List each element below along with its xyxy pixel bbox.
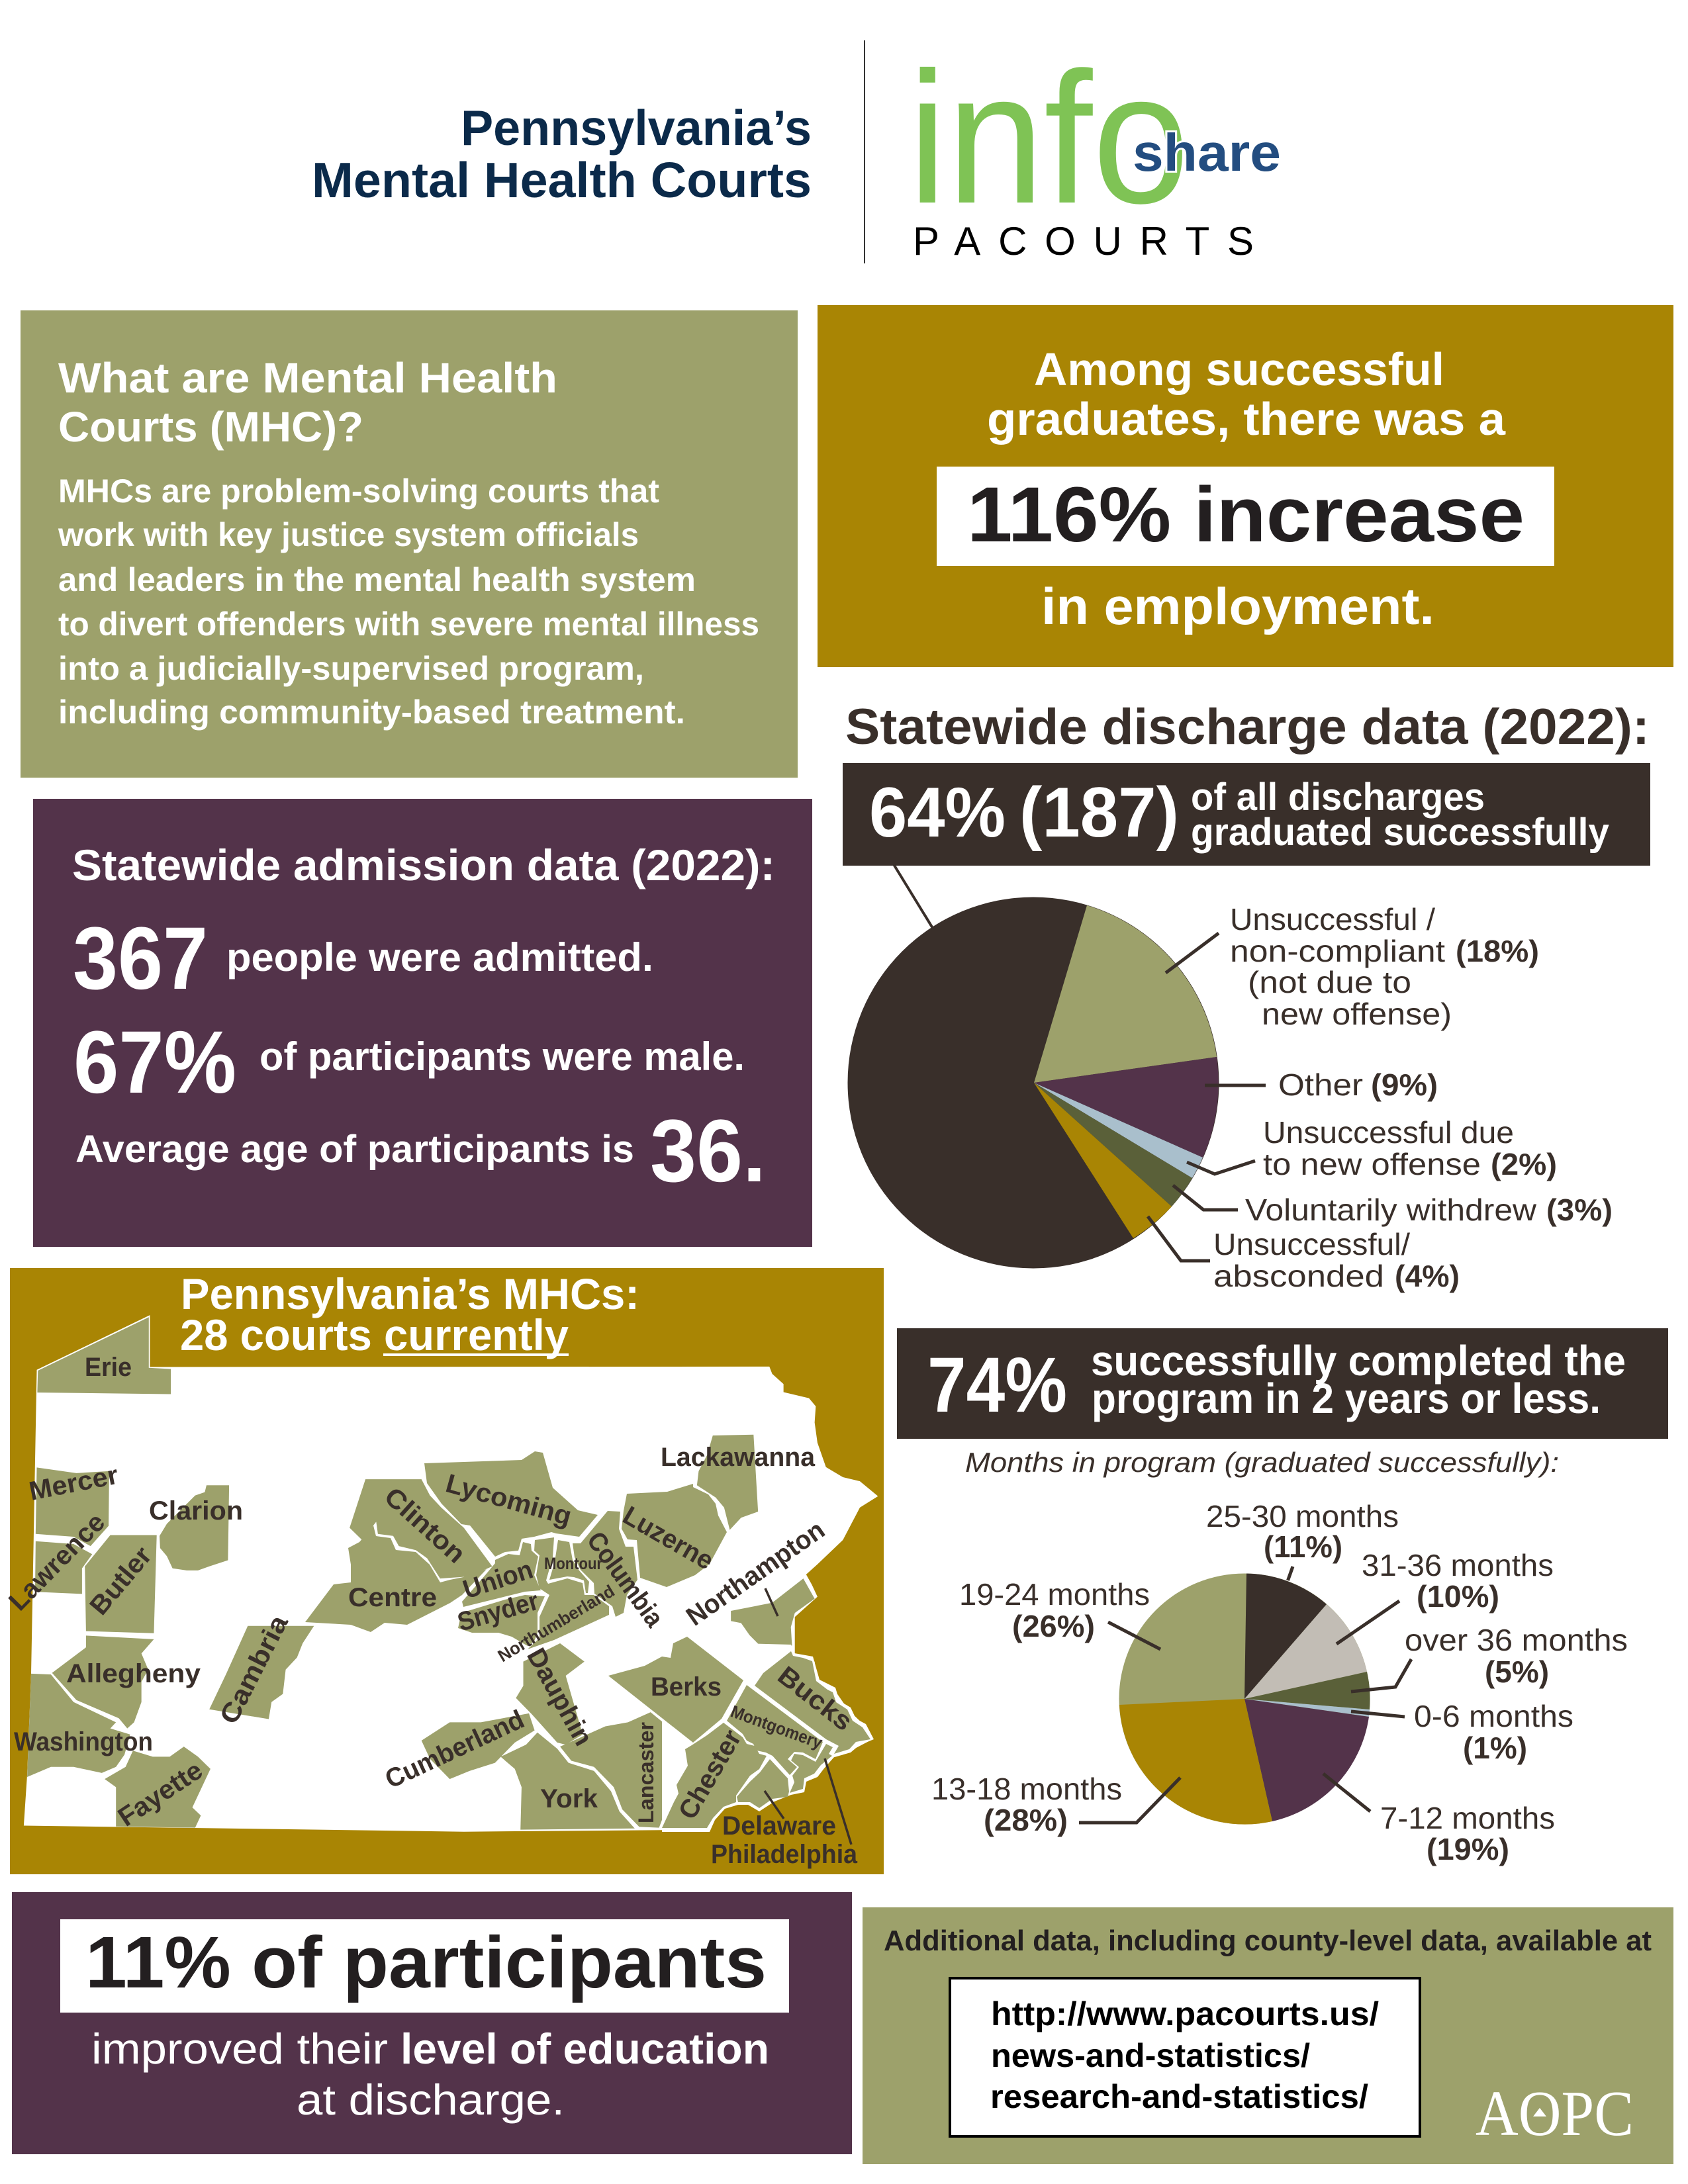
text block: improved level of education: at discharge.: [297, 2075, 565, 2124]
county labels: Cumberland: [381, 1705, 529, 1794]
label: 7-12 months 19%: (19%): [1427, 1832, 1509, 1866]
panel: Pennsylvania map of MHCs: [3, 1268, 884, 1874]
label: unsuccessful non-compliant 18%: Unsuccessful /: [1230, 902, 1435, 936]
label: over 36 months 5%: over 36 months: [1405, 1623, 1628, 1657]
map: central and southeastern counties: [305, 1451, 874, 1832]
heading: months in program: Months in program (graduated successfully):: [965, 1447, 1559, 1478]
callout: 64% graduated successfully: 64%: [869, 772, 1006, 852]
text block: improved level of education: level of education: [400, 2025, 769, 2073]
label: absconded 4%: Unsuccessful/: [1213, 1227, 1410, 1261]
county labels: Washington: [14, 1727, 153, 1756]
county labels: Berks: [651, 1672, 722, 1702]
county labels: Butler: [84, 1541, 158, 1621]
label: unsuccessful non-compliant 18%: [1230, 902, 1539, 1031]
text block: MHC definition: to divert offenders with severe mental illness: [58, 606, 759, 643]
county labels: Clinton: [379, 1482, 471, 1569]
text block: additional data note: Additional data, including county-level data, available at: [884, 1925, 1652, 1957]
label: 19-24 months 26%: (26%): [1012, 1609, 1095, 1643]
heading: Pennsylvania's MHCs 28 courts: Pennsylvania’s MHCs:: [181, 1269, 639, 1318]
logo: AOPC: AOPC: [1476, 2078, 1634, 2150]
county labels: Centre: [348, 1583, 437, 1612]
county labels: Lancaster: [634, 1722, 658, 1823]
label: 0-6 months 1%: 0-6 months: [1414, 1699, 1573, 1733]
county labels: Chester: [673, 1725, 747, 1824]
label: unsuccessful new offense 2%: [1263, 1115, 1557, 1181]
county labels: Bucks: [772, 1661, 858, 1737]
stat: average age 36: 36.: [650, 1102, 766, 1201]
label: unsuccessful non-compliant 18%: (18%): [1456, 934, 1539, 968]
heading: what are MHC: Courts (MHC)?: [58, 403, 363, 451]
label: 13-18 months 28%: (28%): [984, 1803, 1068, 1837]
stat: average age 36: [75, 1102, 766, 1201]
label: 31-36 months 10%: [1362, 1548, 1554, 1614]
county labels: Mercer: [26, 1461, 120, 1506]
logo: infoshare PACOURTS: info: [908, 33, 1190, 242]
label: 0-6 months 1%: (1%): [1463, 1731, 1527, 1765]
county labels: Montour: [544, 1555, 602, 1573]
stat: average age 36: Average age of participants is: [75, 1128, 634, 1171]
text block: MHC definition: into a judicially-supervised program,: [58, 650, 644, 687]
heading: Pennsylvania's MHCs 28 courts: 28 courts currently: [180, 1310, 569, 1359]
callout: 64% graduated successfully: [843, 763, 1650, 866]
label: 25-30 months 11%: (11%): [1264, 1529, 1342, 1564]
county labels: Lackawanna: [661, 1443, 816, 1472]
label: unsuccessful non-compliant 18%: non-compliant: [1230, 934, 1445, 968]
stat: 367 admitted: [73, 909, 653, 1008]
label: unsuccessful non-compliant 18%: new offense): [1262, 997, 1452, 1031]
label: over 36 months 5%: (5%): [1485, 1655, 1549, 1689]
county labels: Dauphin: [521, 1643, 598, 1751]
label: absconded 4%: (4%): [1395, 1259, 1460, 1293]
label: unsuccessful non-compliant 18%: (not due to: [1248, 965, 1411, 999]
label: 0-6 months 1%: [1414, 1699, 1573, 1765]
county labels: Lycoming: [443, 1469, 575, 1531]
panel: what are mental health courts: [21, 310, 798, 778]
stat: 67% male: of participants were male.: [259, 1034, 745, 1079]
label: 13-18 months 28%: 13-18 months: [931, 1772, 1122, 1806]
callout: 74% completed in 2 years: [897, 1328, 1668, 1439]
heading: statewide admission data: Statewide admission data (2022):: [72, 841, 775, 889]
text block: improved level of education: [91, 2025, 769, 2124]
county labels: Columbia: [581, 1526, 669, 1633]
callout: 11% of participants: 11% of participants: [85, 1922, 767, 2003]
label: other 9%: [1278, 1068, 1438, 1102]
callout: 64% graduated successfully: of all discharges: [1191, 776, 1485, 819]
stat: 67% male: 67%: [73, 1013, 236, 1112]
callout: 64% graduated successfully: graduated successfully: [1191, 811, 1609, 854]
title: Pennsylvania's Mental Health Courts: [312, 100, 812, 208]
link box: pacourts URL: [950, 1978, 1420, 2136]
text block: MHC definition: including community-based treatment.: [58, 694, 685, 731]
text block: in employment: in employment.: [1041, 577, 1434, 635]
heading: what are MHC: [58, 354, 557, 451]
stat: 367 admitted: people were admitted.: [226, 935, 653, 979]
stat: 67% male: [73, 1013, 745, 1112]
link box: pacourts URL: http://www.pacourts.us/: [991, 1995, 1379, 2032]
county labels: Montgomery: [728, 1701, 825, 1752]
county labels: Allegheny: [66, 1659, 201, 1688]
label: 19-24 months 26%: 19-24 months: [959, 1577, 1150, 1612]
label: 7-12 months 19%: 7-12 months: [1380, 1801, 1555, 1835]
label: unsuccessful new offense 2%: Unsuccessful due: [1263, 1115, 1514, 1150]
county labels: Union: [459, 1555, 536, 1605]
county labels: Luzerne: [618, 1501, 718, 1576]
county labels: Philadelphia: [711, 1840, 858, 1869]
link box: pacourts URL: research-and-statistics/: [990, 2078, 1368, 2115]
callout: 64% graduated successfully: (187): [1019, 772, 1179, 852]
stat: 367 admitted: 367: [73, 909, 208, 1008]
label: over 36 months 5%: [1405, 1623, 1628, 1689]
county labels: Erie: [85, 1353, 132, 1382]
text block: improved level of education: improved their: [91, 2025, 388, 2073]
heading: statewide discharge data: Statewide discharge data (2022):: [845, 699, 1650, 755]
label: unsuccessful new offense 2%: (2%): [1491, 1147, 1557, 1181]
label: absconded 4%: [1213, 1227, 1460, 1293]
panel: employment increase: [818, 305, 1673, 667]
text block: MHC definition: MHCs are problem-solving courts that: [58, 473, 659, 510]
callout: 74% completed in 2 years: program in 2 years or less.: [1092, 1375, 1601, 1422]
text block: MHC definition: [58, 473, 759, 731]
heading: what are MHC: What are Mental Health: [58, 354, 557, 402]
logo: infoshare PACOURTS: PACOURTS: [913, 219, 1254, 263]
text block: among successful graduates: graduates, there was a: [987, 393, 1506, 445]
county labels: Snyder: [454, 1586, 542, 1637]
county labels: Northampton: [681, 1515, 830, 1631]
county labels: [3, 1353, 858, 1869]
county labels: Northumberland: [494, 1580, 618, 1666]
pie chart: discharge outcomes: [847, 864, 1266, 1268]
text block: MHC definition: and leaders in the mental health system: [58, 561, 696, 598]
map: state outline and western counties: [24, 1315, 878, 1832]
label: 25-30 months 11%: [1206, 1499, 1399, 1564]
label: 31-36 months 10%: (10%): [1417, 1579, 1499, 1614]
label: 13-18 months 28%: [931, 1772, 1122, 1837]
county labels: York: [540, 1784, 598, 1813]
title: Pennsylvania's Mental Health Courts: Mental Health Courts: [312, 152, 812, 208]
label: voluntarily withdrew 3%: (3%): [1546, 1193, 1613, 1227]
callout: 74% completed in 2 years: successfully completed the: [1091, 1337, 1626, 1385]
callout: 74% completed in 2 years: 74%: [927, 1342, 1067, 1429]
label: 25-30 months 11%: 25-30 months: [1206, 1499, 1399, 1533]
county labels: Clarion: [149, 1496, 243, 1525]
heading: Pennsylvania's MHCs 28 courts: [180, 1269, 639, 1359]
label: 31-36 months 10%: 31-36 months: [1362, 1548, 1554, 1582]
panel: statewide admission data: [33, 799, 812, 1247]
logo: infoshare PACOURTS: share: [1133, 123, 1281, 182]
county labels: Lawrence: [3, 1508, 111, 1616]
label: absconded 4%: absconded: [1213, 1259, 1384, 1293]
label: unsuccessful new offense 2%: to new offense: [1263, 1147, 1481, 1181]
label: 19-24 months 26%: [959, 1577, 1150, 1643]
label: 7-12 months 19%: [1380, 1801, 1555, 1866]
link box: pacourts URL: news-and-statistics/: [991, 2037, 1310, 2074]
text block: among successful graduates: [987, 343, 1506, 445]
county labels: Cambria: [214, 1610, 294, 1729]
pie chart: months in program: [1079, 1567, 1411, 1825]
callout: 116% increase: 116% increase: [967, 471, 1524, 559]
label: other 9%: Other: [1278, 1068, 1363, 1102]
county labels: Delaware: [722, 1811, 836, 1841]
text block: among successful graduates: Among successful: [1034, 343, 1444, 395]
title: Pennsylvania's Mental Health Courts: Pennsylvania’s: [461, 100, 812, 156]
county labels: Fayette: [113, 1756, 208, 1832]
label: voluntarily withdrew 3%: Voluntarily withdrew: [1245, 1193, 1537, 1227]
panel: level of education: [12, 1892, 852, 2154]
label: other 9%: (9%): [1371, 1068, 1438, 1102]
text block: MHC definition: work with key justice system officials: [58, 516, 639, 553]
panel: additional data: [863, 1907, 1673, 2164]
